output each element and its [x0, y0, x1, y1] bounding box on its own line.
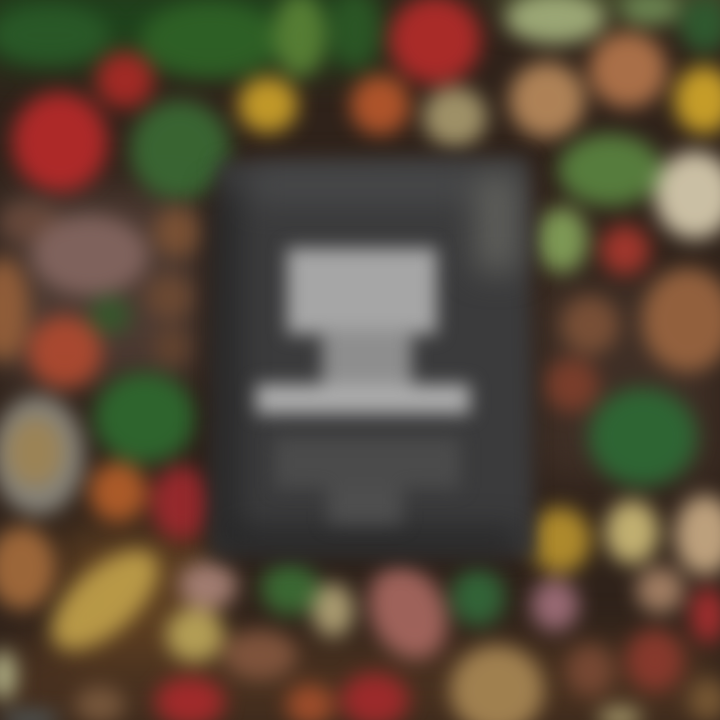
left foods — [0, 202, 213, 610]
faint chalk body lines — [275, 438, 460, 524]
chalk title lettering — [256, 248, 470, 414]
chalkboard — [212, 158, 534, 556]
board left shadow and top-right sheen — [216, 170, 520, 552]
top foods — [0, 0, 720, 200]
bottom foods — [0, 532, 544, 720]
right foods — [529, 134, 720, 720]
